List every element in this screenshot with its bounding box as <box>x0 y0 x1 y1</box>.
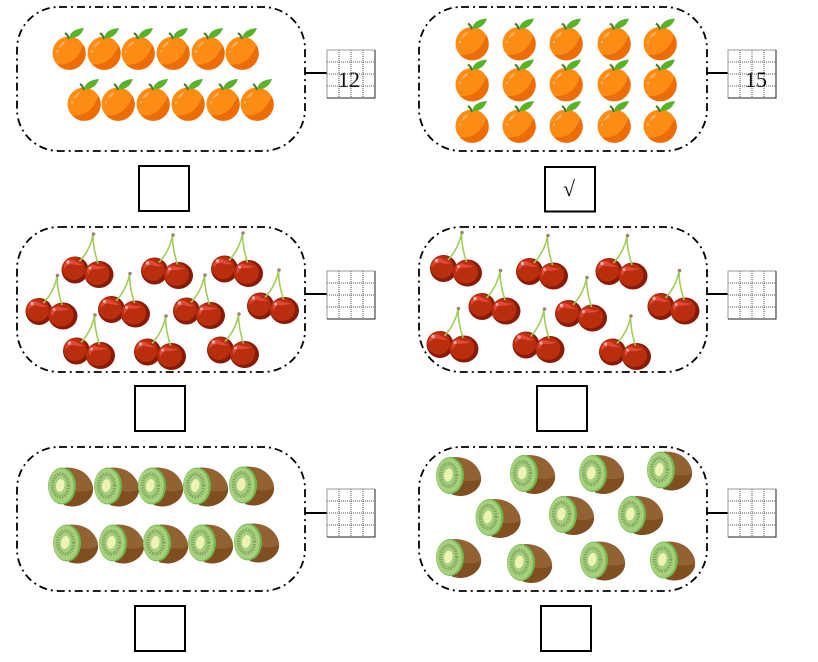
answer grid: kiwis right <box>707 489 776 537</box>
panel: oranges twelve <box>17 7 305 151</box>
answer grid: cherries left <box>305 271 375 319</box>
answer grid: cherries right <box>707 271 776 319</box>
checkbox: oranges fifteen, checked <box>545 167 595 212</box>
checkbox: kiwis right <box>541 606 591 651</box>
panel: kiwis left <box>17 447 305 591</box>
checkbox: oranges fifteen, checked: √ <box>563 176 576 201</box>
panel: cherries right <box>419 227 707 372</box>
answer grid: 15: 15 <box>745 67 767 92</box>
checkbox: oranges twelve <box>139 166 189 211</box>
panel: oranges fifteen <box>419 7 707 151</box>
answer grid: 12: 12 <box>338 67 360 92</box>
answer grid: 12 <box>305 50 375 98</box>
answer grid: kiwis left <box>305 489 375 537</box>
checkbox: kiwis left <box>135 606 185 651</box>
panel: cherries left <box>17 227 305 372</box>
answer grid: 15 <box>707 50 776 98</box>
panel: kiwis right <box>419 447 707 591</box>
checkbox: cherries right <box>537 386 587 431</box>
checkbox: cherries left <box>135 386 185 431</box>
